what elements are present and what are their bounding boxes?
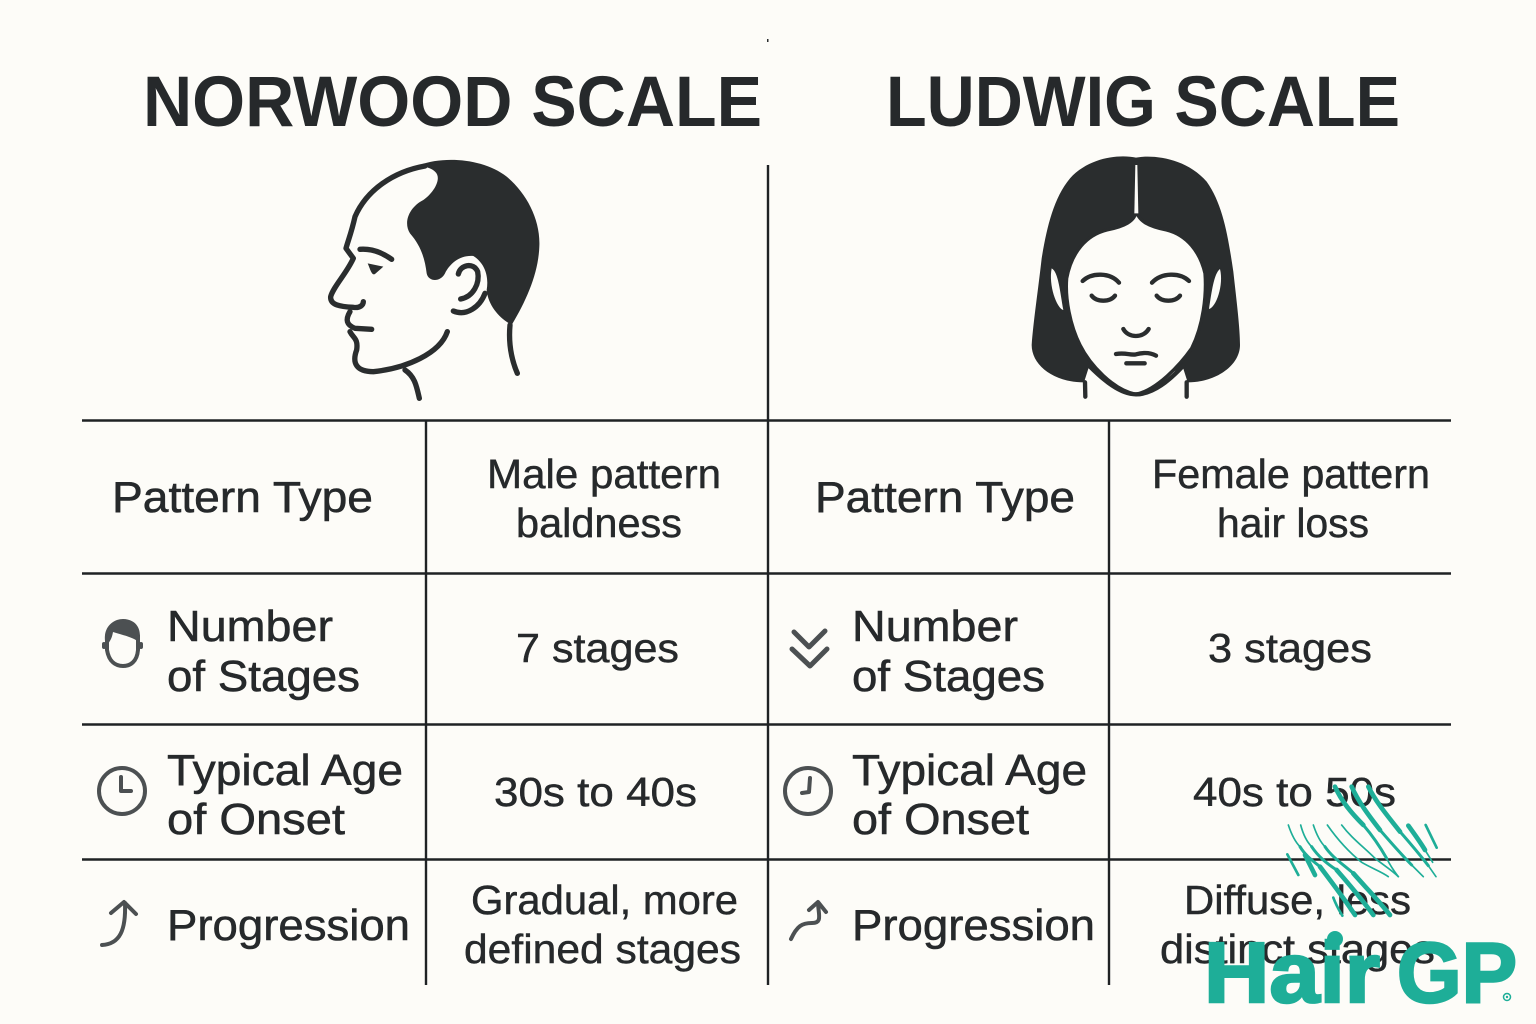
Norwood row: number of stages [104, 602, 679, 701]
Ludwig row: typical age of onset [785, 746, 1396, 844]
Norwood row: pattern type [112, 451, 721, 546]
icon: female head with centre part [1032, 156, 1240, 397]
Norwood row: number of stages: 7 stages [516, 625, 679, 671]
Ludwig row: number of stages: of Stages [852, 652, 1045, 701]
Ludwig row: progression: Progression [852, 901, 1095, 950]
Ludwig row: pattern type: Female pattern [1152, 451, 1430, 497]
Norwood row: typical age of onset: 30s to 40s [494, 769, 697, 815]
Norwood row: number of stages: Number [167, 602, 333, 651]
Norwood row: pattern type: baldness [516, 500, 682, 546]
logo registered mark [1504, 994, 1510, 1000]
Ludwig row: pattern type [815, 451, 1430, 546]
Norwood row: typical age of onset [99, 746, 697, 844]
Ludwig row: typical age of onset: Typical Age [852, 746, 1087, 795]
Norwood row: progression [102, 877, 741, 972]
Ludwig row: pattern type: hair loss [1217, 500, 1369, 546]
icon: head with hair [104, 619, 141, 666]
Norwood row: typical age of onset: of Onset [167, 795, 345, 844]
title: Ludwig Scale: LUDWIG SCALE [886, 63, 1400, 142]
Ludwig row: pattern type: Pattern Type [815, 473, 1075, 522]
Norwood row: pattern type: Pattern Type [112, 473, 373, 522]
Ludwig row: number of stages [792, 602, 1372, 701]
Norwood row: number of stages: of Stages [167, 652, 360, 701]
icon: curved up arrow [102, 902, 136, 945]
Norwood row: progression: defined stages [464, 926, 741, 972]
Ludwig row: typical age of onset: of Onset [852, 795, 1029, 844]
Ludwig row: number of stages: 3 stages [1208, 625, 1372, 671]
Norwood row: progression: Gradual, more [471, 877, 738, 923]
logo hair strokes [1287, 787, 1437, 916]
logo: HairGP: GP [1397, 926, 1517, 1021]
table grid lines [82, 165, 1451, 985]
icon: wavy up arrow [791, 902, 826, 939]
icon: male head profile with receding hairline [331, 160, 539, 398]
logo: HairGP [1204, 787, 1517, 1021]
Norwood row: typical age of onset: Typical Age [167, 746, 403, 795]
Ludwig row: progression [791, 877, 1435, 972]
Ludwig row: progression: Diffuse, less [1184, 877, 1411, 923]
icon: clock [99, 768, 145, 814]
icon: clock [785, 768, 831, 814]
Ludwig row: typical age of onset: 40s to 50s [1193, 769, 1396, 815]
Ludwig row: number of stages: Number [852, 602, 1018, 651]
Ludwig row: progression: distinct stages [1160, 926, 1435, 972]
logo: HairGP: Hair [1204, 926, 1380, 1021]
title: Norwood Scale: NORWOOD SCALE [143, 63, 762, 142]
Norwood row: progression: Progression [167, 901, 410, 950]
Norwood row: pattern type: Male pattern [487, 451, 721, 497]
icon: double chevron down [792, 631, 827, 666]
